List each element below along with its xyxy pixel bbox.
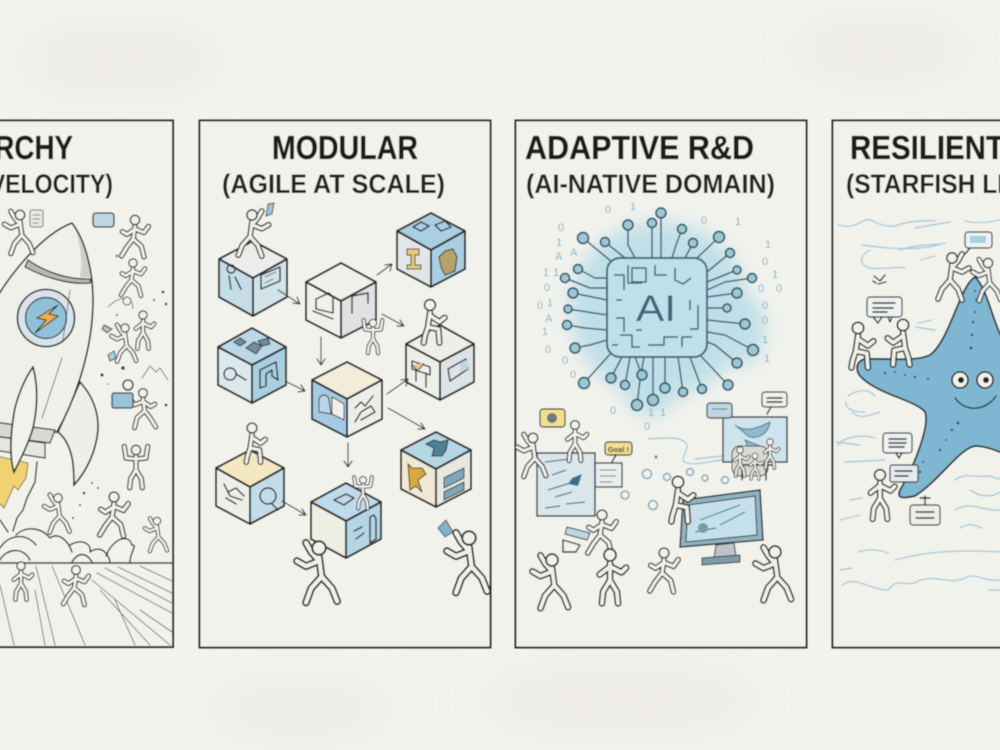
rocket band: [25, 260, 91, 283]
small person: [145, 517, 167, 551]
person right: [755, 546, 791, 600]
ground and launch lines: [0, 563, 173, 645]
running person with sign: [122, 215, 148, 257]
person lower: [871, 470, 895, 519]
small icons around people: [72, 255, 167, 519]
flame: [0, 456, 28, 508]
AI chip graphic: [537, 201, 782, 433]
rocket right fin: [58, 382, 98, 485]
heading: adaptive: ADAPTIVE R&D: [525, 129, 754, 166]
monitor: [680, 490, 763, 565]
panel 1 frame: [0, 120, 173, 647]
sign: [93, 213, 114, 227]
binary digits: 1: [553, 267, 559, 279]
starfish dots: [884, 290, 977, 473]
starfish body: [857, 277, 1000, 498]
binary digits: 1: [547, 297, 553, 309]
person running: [121, 259, 145, 296]
binary digits: 1: [543, 267, 549, 279]
person centre: [600, 549, 626, 603]
cube 7: [401, 432, 471, 507]
binary digits: 0: [570, 369, 576, 381]
binary digits: 0: [545, 344, 551, 356]
binary digits: 0: [558, 222, 564, 234]
binary digits: 1: [765, 239, 771, 251]
person left 1: [851, 322, 873, 368]
cube 2: [306, 263, 376, 338]
team at display: [734, 439, 779, 479]
speech bubble 2: [762, 392, 787, 414]
AI label: AI: [636, 288, 676, 329]
panel: adaptive R&D: [516, 120, 806, 648]
binary digits: 1: [660, 407, 666, 419]
panel: resilient: [832, 120, 1000, 648]
person top left: [938, 253, 969, 300]
box: [112, 380, 133, 408]
yellow bubble with label: Goal !: [608, 445, 629, 454]
eye left: [952, 372, 968, 388]
two people working together: [111, 311, 154, 362]
note by person: [890, 465, 918, 482]
binary digits: 1: [762, 334, 768, 346]
binary digits: 1: [630, 201, 636, 213]
person running to monitor: [650, 548, 678, 592]
person on cube 6: [424, 300, 445, 343]
circuit nodes: [560, 208, 758, 410]
person with box: [130, 389, 156, 428]
binary digits: 1: [735, 216, 741, 228]
panel: hierarchy: [0, 120, 173, 647]
blue flag 2: [438, 520, 453, 537]
launch cloud: [0, 529, 134, 562]
person seated on cube 8: [246, 423, 265, 462]
person left: [532, 554, 568, 608]
watercolour wash: [570, 222, 765, 415]
person on ground: [14, 562, 32, 600]
binary digits: [537, 201, 782, 433]
binary digits: A: [570, 247, 578, 259]
sparkle: [873, 275, 886, 284]
binary digits: 1: [772, 269, 778, 281]
cube 3: [397, 213, 465, 287]
lightning bolt: [35, 305, 58, 333]
binary digits: 1: [542, 326, 548, 338]
eye right: [977, 372, 993, 388]
smile: [955, 396, 996, 408]
cube 9: [311, 483, 381, 558]
person left 2: [888, 319, 910, 365]
person running right: [100, 492, 128, 536]
binary digits: A: [545, 313, 553, 325]
person carrying paper: [563, 510, 616, 554]
heading: modular: MODULAR: [272, 129, 418, 166]
speech bubble top: [965, 232, 992, 254]
rocket porthole: [18, 290, 74, 346]
binary digits: 0: [776, 283, 782, 295]
blue flag: [266, 203, 274, 216]
person at cube 2: [364, 319, 382, 353]
person running bottom: [297, 541, 337, 603]
person with tablet: [4, 210, 33, 254]
subheading: agile at scale: (AGILE AT SCALE): [222, 169, 445, 199]
binary digits: 0: [562, 355, 568, 367]
speech bubble: [707, 403, 732, 418]
person top right: [973, 258, 1000, 301]
binary digits: 0: [610, 405, 616, 417]
person on cube 1: [238, 210, 269, 256]
starfish: [857, 277, 1000, 498]
right display: [723, 417, 787, 480]
rocket: [0, 223, 98, 485]
person with blue flag: [447, 531, 487, 593]
binary digits: 1: [556, 237, 562, 249]
waves: [836, 220, 1000, 590]
tablet: [30, 210, 43, 227]
rocket nose shading: [76, 232, 90, 278]
cube 4: [218, 328, 286, 403]
person near cloud: [44, 494, 69, 532]
card below starfish: [910, 496, 940, 525]
binary digits: 0: [762, 300, 768, 312]
binary digits: 1: [764, 353, 770, 365]
binary digits: 0: [701, 215, 707, 227]
person running on ground: [63, 566, 89, 605]
binary digits: A: [555, 251, 563, 263]
person arms raised: [124, 445, 148, 488]
binary digits: 0: [544, 282, 550, 294]
chip body: [607, 258, 707, 357]
speech bubble lower: [883, 433, 912, 458]
binary digits: 0: [605, 204, 611, 216]
rocket body: [0, 223, 93, 432]
binary digits: 1: [648, 407, 654, 419]
binary digits: 0: [758, 283, 764, 295]
panel 2 frame: [200, 120, 490, 648]
yellow bubble with label: [605, 442, 632, 462]
arrows: [278, 264, 425, 515]
left whiteboard: [537, 453, 622, 516]
cube 8: [216, 450, 284, 524]
speech bubble left: [867, 297, 902, 323]
person by bubble: [567, 421, 587, 461]
panel: modular: [200, 120, 490, 648]
rocket base band: [0, 422, 55, 443]
person on cube 9: [354, 476, 372, 509]
binary digits: 0: [762, 315, 768, 327]
binary digits: 0: [644, 421, 650, 433]
subheading: AI-native domain: (AI-NATIVE DOMAIN): [526, 169, 775, 199]
rocket centre fin: [11, 367, 37, 472]
person on left board: [517, 433, 546, 477]
circuit traces: [565, 213, 753, 405]
panel 3 frame: [516, 120, 806, 648]
chip circuit detail: [612, 265, 698, 347]
data stream: [621, 438, 728, 510]
cube 6: [406, 325, 474, 400]
yellow bubble: [540, 409, 565, 427]
person on monitor: [671, 476, 693, 522]
cube 1: [219, 241, 287, 316]
cube 5: [312, 362, 382, 437]
binary digits: 0: [537, 300, 543, 312]
binary digits: 0: [762, 256, 768, 268]
panel 4 frame: [832, 120, 1000, 648]
